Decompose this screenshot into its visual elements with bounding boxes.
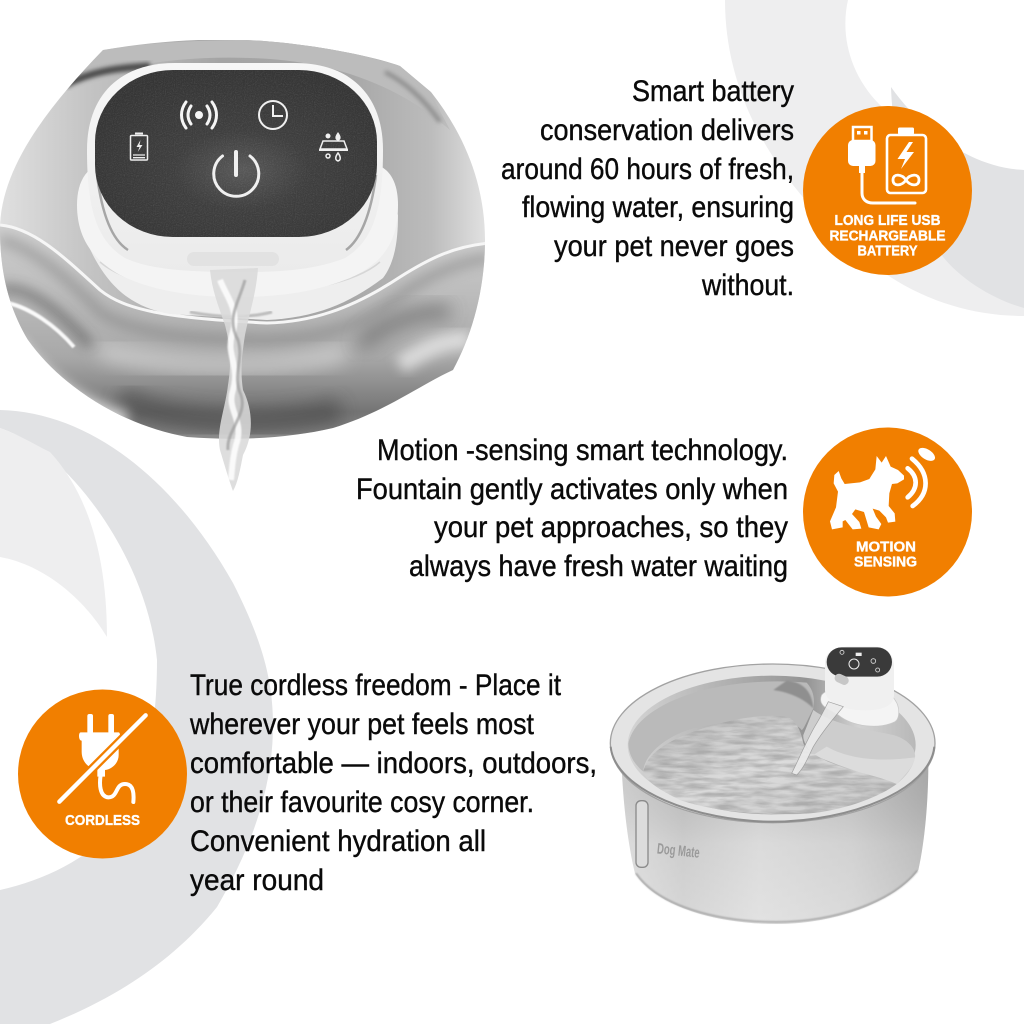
photo: white housing [87, 63, 383, 272]
text: battery conservation: Smart battery [632, 75, 794, 108]
text: battery conservation: conservation delivers [540, 114, 794, 147]
photo: black touch panel [95, 70, 377, 237]
deck beside module [803, 710, 915, 784]
text: motion sensing [356, 434, 788, 583]
icon: battery with infinity [887, 128, 926, 193]
icon: battery [130, 134, 148, 160]
badge: long life USB rechargeable battery [803, 106, 972, 275]
text: cordless freedom: Convenient hydration all [190, 825, 486, 858]
text: motion sensing: Fountain gently activates only when [356, 473, 788, 506]
photo: water stream [210, 268, 258, 491]
text: battery conservation: without. [701, 269, 794, 302]
icon: USB cable [848, 127, 915, 203]
icon: motion signal [182, 102, 216, 128]
photo: white fountain flange [80, 167, 398, 320]
water stream [792, 702, 843, 775]
text: cordless freedom: True cordless freedom - Place it [190, 669, 561, 702]
inner wall [628, 676, 916, 814]
text: battery conservation: your pet never goes [554, 230, 794, 263]
text: cordless freedom: or their favourite cosy corner. [190, 786, 534, 819]
fountain module [821, 647, 899, 726]
text: battery conservation: around 60 hours of fresh, [501, 153, 794, 186]
text: cordless freedom: comfortable — indoors, outdoors, [190, 747, 597, 780]
icon: clock [259, 101, 287, 129]
icon: dog with motion waves [830, 445, 937, 529]
badge label: CORDLESS [65, 813, 140, 829]
text: motion sensing: your pet approaches, so they [434, 511, 788, 544]
product photo: stainless steel fountain [610, 647, 935, 924]
badge label [854, 540, 917, 570]
badge label: BATTERY [858, 244, 918, 260]
text: cordless freedom: wherever your pet feels most [189, 708, 534, 741]
badge label: LONG LIFE USB [834, 213, 940, 229]
text: cordless freedom: year round [190, 864, 324, 897]
photo: steel bowl lower surface [0, 225, 490, 445]
badge label: RECHARGEABLE [830, 228, 946, 244]
photo: white fountain base [77, 163, 398, 297]
level window [636, 801, 648, 867]
badge: cordless [18, 690, 187, 858]
background: top-right swirl [725, 0, 1024, 316]
badge label: MOTION [856, 540, 916, 556]
bowl body [622, 763, 928, 924]
photo: steel bowl upper surface [0, 40, 490, 340]
water [640, 712, 900, 817]
product photo: close-up of control panel [0, 40, 490, 491]
badge: motion sensing [803, 428, 972, 596]
background: left swirl [0, 410, 273, 1024]
icon: crossed-out plug [59, 714, 146, 802]
text: battery conservation: flowing water, ensuring [522, 191, 794, 224]
text: motion sensing: always have fresh water waiting [409, 550, 788, 583]
text: battery conservation [501, 75, 794, 302]
text: cordless freedom [189, 669, 597, 897]
icon: power button [214, 152, 259, 196]
icon: water filter [319, 132, 348, 161]
rim [610, 664, 935, 823]
badge label [830, 213, 946, 260]
badge label: SENSING [854, 554, 917, 570]
text: motion sensing: Motion -sensing smart technology. [377, 434, 788, 467]
brand mark: Dog Mate [656, 840, 700, 862]
